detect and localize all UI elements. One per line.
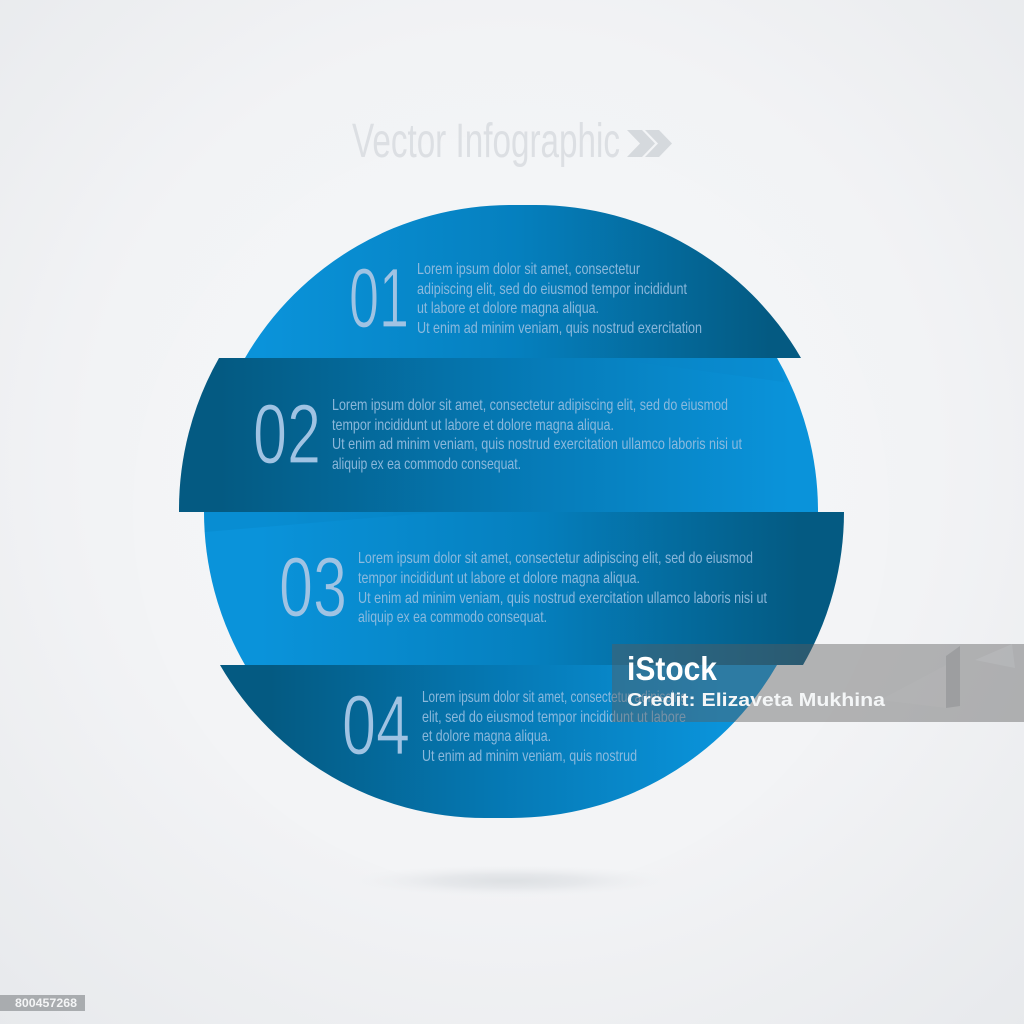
halo circle	[133, 134, 889, 890]
image id label	[0, 995, 85, 1011]
number 01: 01	[349, 251, 409, 345]
text block 02: Lorem ipsum dolor sit amet, consectetur adipiscing elit, sed do eiusmod	[332, 397, 728, 414]
text block 02: Ut enim ad minim veniam, quis nostrud exercitation ullamco laboris nisi ut	[332, 436, 742, 453]
icon: double chevron arrow	[627, 130, 672, 157]
text block 03: aliquip ex ea commodo consequat.	[358, 609, 547, 626]
text block 02	[332, 397, 742, 473]
text block 01: ut labore et dolore magna aliqua.	[417, 300, 599, 317]
text block 03	[358, 550, 767, 626]
text block 01	[417, 261, 702, 337]
text block 03: Ut enim ad minim veniam, quis nostrud exercitation ullamco laboris nisi ut	[358, 590, 767, 607]
number 03: 03	[279, 540, 347, 634]
text block 03: tempor incididunt ut labore et dolore magna aliqua.	[358, 570, 640, 587]
text block 04: et dolore magna aliqua.	[422, 728, 551, 745]
text block 04: Ut enim ad minim veniam, quis nostrud	[422, 748, 637, 765]
text block 02: tempor incididunt ut labore et dolore magna aliqua.	[332, 417, 614, 434]
panel: band 01	[245, 205, 801, 358]
panel: band 03	[204, 512, 844, 665]
text block 04: elit, sed do eiusmod tempor incididunt ut labore	[422, 709, 686, 726]
text block 01: adipiscing elit, sed do eiusmod tempor incididunt	[417, 281, 687, 298]
text block 01: Lorem ipsum dolor sit amet, consectetur	[417, 261, 641, 278]
text block 04	[422, 689, 687, 765]
text block 02: aliquip ex ea commodo consequat.	[332, 456, 521, 473]
drop shadow	[345, 865, 675, 897]
text block 01: Ut enim ad minim veniam, quis nostrud exercitation	[417, 320, 702, 337]
panel: band 02	[179, 358, 818, 512]
text block 03: Lorem ipsum dolor sit amet, consectetur adipiscing elit, sed do eiusmod	[358, 550, 753, 567]
number 02: 02	[253, 387, 321, 481]
text block 04: Lorem ipsum dolor sit amet, consectetur adipiscing	[422, 689, 687, 706]
panel: band 04	[220, 665, 777, 818]
circle infographic	[179, 205, 844, 818]
number 04: 04	[342, 678, 410, 772]
watermark logo: iStock	[627, 650, 718, 687]
watermark	[612, 644, 1024, 722]
watermark credit: Credit: Elizaveta Mukhina	[627, 690, 886, 710]
title: Vector Infographic	[352, 115, 620, 168]
image id label: 800457268	[15, 996, 77, 1010]
